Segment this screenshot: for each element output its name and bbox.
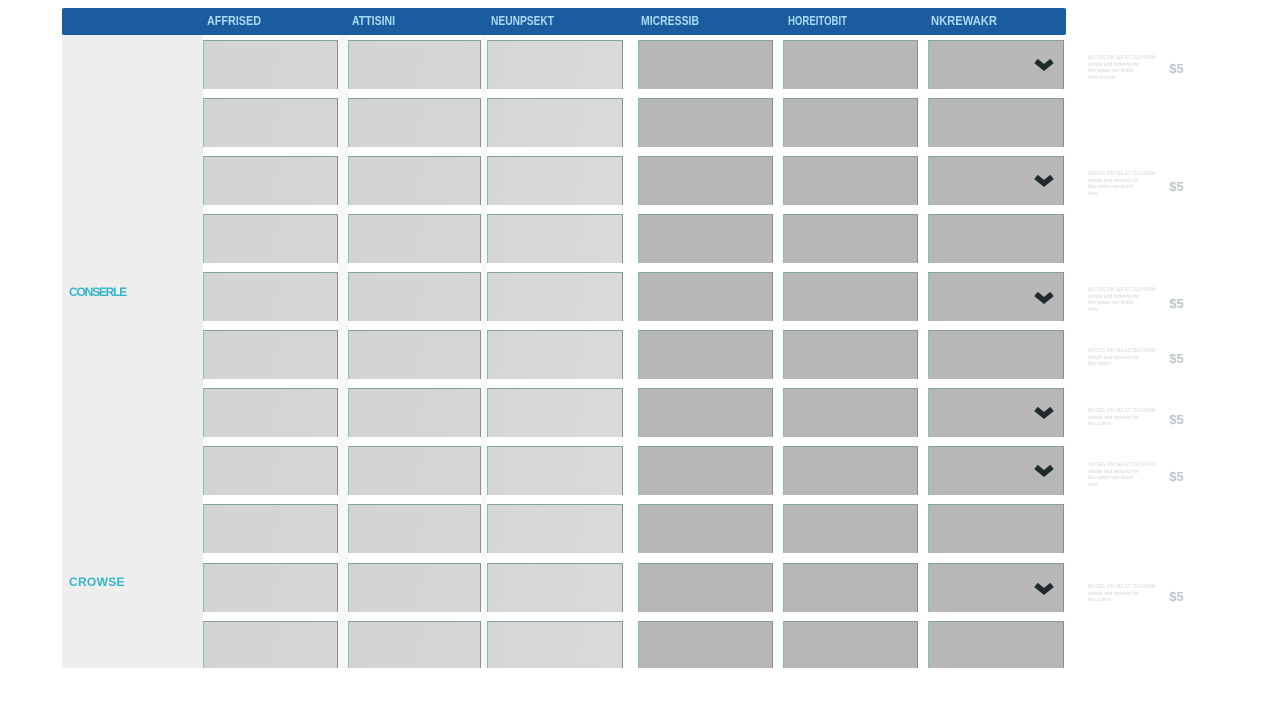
value 7: $5 bbox=[1169, 589, 1184, 604]
row 1 bbox=[203, 40, 1064, 89]
side note 3: here bbox=[1088, 306, 1098, 312]
side note 5: details and remarks for bbox=[1088, 414, 1139, 420]
row 9 bbox=[203, 504, 1064, 553]
side note 4: NOTES ON SELECTED ROW bbox=[1088, 348, 1156, 354]
sidebar label: consider: CONSERLE bbox=[69, 285, 126, 299]
side note 1: here in brief bbox=[1088, 74, 1114, 80]
icon: chevron bbox=[1034, 174, 1054, 187]
icon: chevron bbox=[1034, 406, 1054, 419]
side note 3: NOTES ON SELECTED ROW bbox=[1088, 287, 1156, 293]
panel: left sidebar bbox=[62, 35, 203, 668]
row 10 bbox=[203, 563, 1064, 612]
side note 2: details and remarks for bbox=[1088, 178, 1139, 184]
icon: chevron bbox=[1034, 464, 1054, 477]
side note 1 bbox=[1088, 55, 1156, 80]
column heading 3: NEUNPSEKT bbox=[491, 13, 554, 28]
icon: chevron bbox=[1034, 292, 1054, 304]
side note 7 bbox=[1088, 584, 1156, 603]
side note 6: here bbox=[1088, 482, 1098, 488]
side note 7: this option bbox=[1088, 597, 1111, 603]
value 1: $5 bbox=[1169, 61, 1184, 76]
side note 3: details and remarks for bbox=[1088, 294, 1139, 300]
column heading 4: MICRESSIB bbox=[641, 13, 699, 28]
value 6: $5 bbox=[1169, 469, 1184, 484]
side note 6: NOTES ON SELECTED ROW bbox=[1088, 462, 1156, 468]
row 4 bbox=[203, 214, 1064, 263]
value 2: $5 bbox=[1169, 179, 1184, 194]
side note 2: here bbox=[1088, 190, 1098, 196]
sidebar label: crowse: CROWSE bbox=[69, 575, 125, 589]
side note 6: this option are listed bbox=[1088, 475, 1132, 481]
side note 4: details and remarks for bbox=[1088, 354, 1139, 360]
side note 7: details and remarks for bbox=[1088, 590, 1139, 596]
row 3 bbox=[203, 156, 1064, 205]
side note 2: this option are listed bbox=[1088, 184, 1132, 190]
side note 5 bbox=[1088, 408, 1156, 427]
side note 4: this option bbox=[1088, 361, 1111, 367]
side note 4 bbox=[1088, 348, 1156, 367]
header bar bbox=[62, 8, 1066, 35]
side note 1: NOTES ON SELECTED ROW bbox=[1088, 55, 1156, 61]
side note 1: this option are listed bbox=[1088, 68, 1132, 74]
column heading 1: AFFRISED bbox=[207, 13, 261, 28]
row 11 bbox=[203, 621, 1064, 668]
column gap shading bbox=[481, 35, 487, 668]
value 3: $5 bbox=[1169, 296, 1184, 311]
row 8 bbox=[203, 446, 1064, 495]
side note 5: this option bbox=[1088, 421, 1111, 427]
side note 2: NOTES ON SELECTED ROW bbox=[1088, 171, 1156, 177]
column gap shading bbox=[338, 35, 348, 668]
row 6 bbox=[203, 330, 1064, 379]
value 5: $5 bbox=[1169, 412, 1184, 427]
row 7 bbox=[203, 388, 1064, 437]
side note 5: NOTES ON SELECTED ROW bbox=[1088, 408, 1156, 414]
side note 6 bbox=[1088, 462, 1156, 488]
side note 3: this option are listed bbox=[1088, 300, 1132, 306]
icon: chevron bbox=[1034, 582, 1054, 595]
column heading 5: HOREITOBIT bbox=[788, 13, 847, 28]
column heading 6: NKREWAKR bbox=[931, 13, 998, 28]
icon: chevron bbox=[1034, 58, 1054, 71]
row 5 bbox=[203, 272, 1064, 321]
column heading 2: ATTISINI bbox=[352, 13, 395, 28]
side note 6: details and remarks for bbox=[1088, 468, 1139, 474]
side note 7: NOTES ON SELECTED ROW bbox=[1088, 584, 1156, 590]
value 4: $5 bbox=[1169, 351, 1184, 366]
side note 3 bbox=[1088, 287, 1156, 312]
side note 1: details and remarks for bbox=[1088, 62, 1139, 68]
row 2 bbox=[203, 98, 1064, 147]
side note 2 bbox=[1088, 171, 1156, 196]
